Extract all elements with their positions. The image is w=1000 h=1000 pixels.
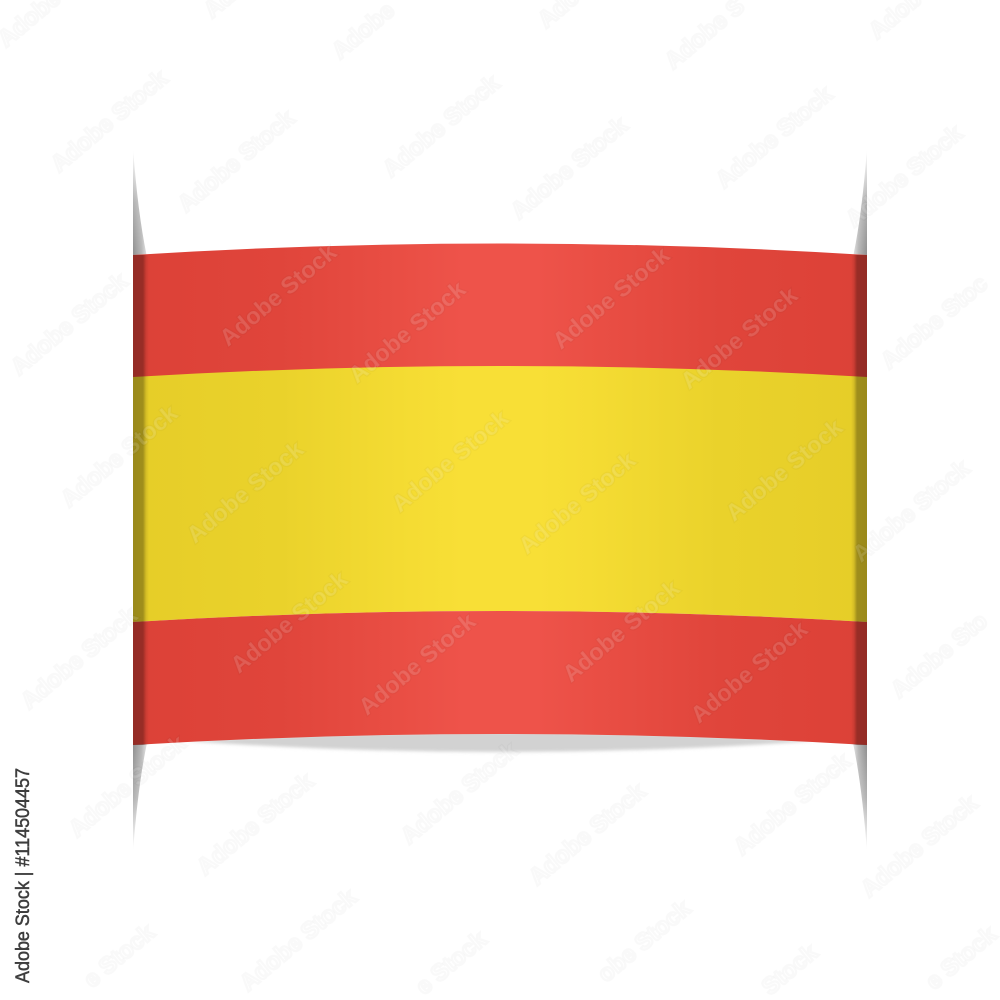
banner cast shadow xyxy=(185,732,815,752)
watermarks: obe Stock xyxy=(592,894,696,987)
right fold shadow xyxy=(851,255,867,745)
watermarks: Adobe Stock xyxy=(523,777,651,890)
watermarks: Adobe Stock xyxy=(234,883,362,996)
watermarks: Adobe Stock xyxy=(395,736,523,849)
watermarks: e Stock xyxy=(410,925,492,1000)
watermarks: Adobe Stock xyxy=(847,454,975,567)
watermarks: Stock xyxy=(756,938,823,1000)
watermarks: Adobe Stock xyxy=(225,565,353,678)
slot shadow: top left xyxy=(133,156,146,255)
watermarks: Adobe Stock xyxy=(191,767,319,880)
watermarks: Adobe Stock xyxy=(685,615,813,728)
watermarks: e Stock xyxy=(920,920,1000,995)
watermarks: Adobe Stock xyxy=(5,267,133,380)
watermarks: Adobe Stock xyxy=(55,399,183,512)
watermarks: Adobe Stock xyxy=(63,729,191,842)
watermarks: Adobe Stock xyxy=(377,69,505,182)
bottom red stripe xyxy=(133,611,867,745)
watermarks: e Stock xyxy=(78,918,160,993)
watermarks: Adobe Stock xyxy=(513,446,641,559)
top red stripe xyxy=(133,244,867,378)
watermarks: Adobe Sto xyxy=(886,607,992,703)
watermarks: Adobe Stock xyxy=(557,574,685,687)
flag xyxy=(133,244,867,745)
middle yellow stripe xyxy=(133,366,867,622)
watermarks: Adobe Stock xyxy=(855,789,983,902)
watermarks: Adobe Stock xyxy=(728,747,856,860)
watermarks: Adobe Stock xyxy=(181,435,309,548)
watermarks: Adobe Stock xyxy=(45,64,173,177)
watermarks: Adobe Stock xyxy=(710,80,838,193)
watermarks: Adobe Stock xyxy=(214,238,342,351)
watermarks: Adobe Stock xyxy=(343,275,471,388)
watermarks: Adobe Stock xyxy=(172,104,300,217)
watermarks: Adobe Stock xyxy=(720,413,848,526)
slot shadow: top right xyxy=(854,156,867,255)
slot shadow: bottom left xyxy=(133,744,146,844)
watermarks: Adobe Stock xyxy=(840,119,968,232)
slot shadow: bottom right xyxy=(854,744,867,844)
watermarks: Adobe Stock xyxy=(675,281,803,394)
watermarks: Adobe Stoc xyxy=(876,270,992,374)
left fold shadow xyxy=(133,255,149,745)
stock id label: Adobe Stock | #114504457 xyxy=(13,768,34,983)
watermarks: Adobe Stock xyxy=(505,111,633,224)
watermarks: Adobe Stock xyxy=(353,607,481,720)
watermarks: Adobe Stock xyxy=(15,601,143,714)
watermarks: Adobe Stock xyxy=(547,241,675,354)
watermarks: Adobe Stock xyxy=(386,404,514,517)
